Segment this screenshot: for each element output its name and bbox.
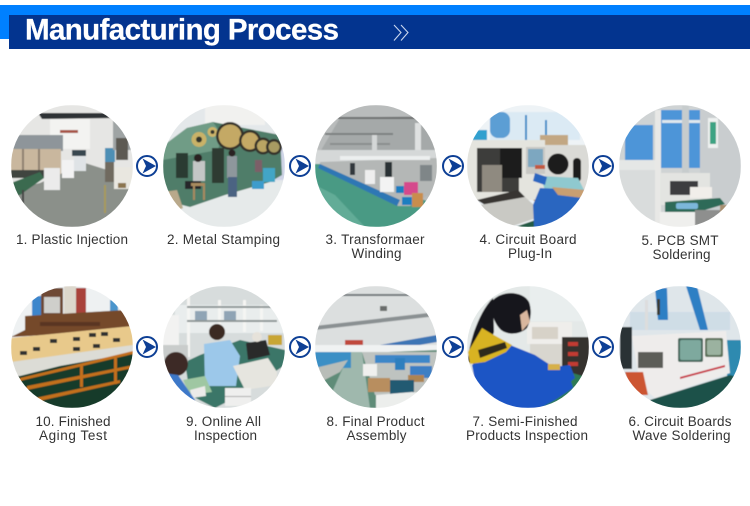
icon: double chevron bbox=[394, 25, 408, 40]
photo: semi-finished inspection bbox=[467, 286, 589, 408]
label: 9. Online All bbox=[186, 414, 261, 429]
step 1: plastic injection bbox=[11, 105, 133, 247]
label: Inspection bbox=[194, 428, 257, 443]
photo: circuit boards wave soldering bbox=[619, 286, 741, 408]
label: 5. PCB SMT bbox=[642, 233, 718, 248]
arrow 7 to 6 bbox=[593, 337, 613, 357]
label: Wave Soldering bbox=[632, 428, 730, 443]
label: Assembly bbox=[346, 428, 407, 443]
label: Aging Test bbox=[39, 428, 107, 443]
step 9: online all inspection bbox=[163, 286, 285, 443]
label: 1. Plastic Injection bbox=[16, 232, 128, 247]
step 5: pcb smt soldering bbox=[619, 105, 741, 262]
photo: metal stamping bbox=[163, 105, 285, 227]
photo: final product assembly bbox=[315, 286, 437, 408]
arrow 3 to 4 bbox=[443, 156, 463, 176]
label: 8. Final Product bbox=[326, 414, 425, 429]
title: Manufacturing Process bbox=[25, 14, 339, 46]
label: Plug-In bbox=[508, 246, 552, 261]
photo: pcb smt soldering bbox=[619, 105, 741, 227]
label: 3. Transformaer bbox=[326, 232, 425, 247]
label bbox=[466, 414, 588, 443]
arrow 4 to 5 bbox=[593, 156, 613, 176]
step 8: final product assembly bbox=[315, 286, 437, 443]
label bbox=[36, 414, 110, 443]
label: Products Inspection bbox=[466, 428, 588, 443]
step 4: circuit board plug-in bbox=[467, 105, 589, 261]
label bbox=[326, 232, 425, 261]
step 6: circuit boards wave soldering bbox=[619, 286, 741, 443]
arrow 2 to 3 bbox=[290, 156, 310, 176]
header banner bbox=[0, 5, 750, 49]
label: 2. Metal Stamping bbox=[167, 232, 280, 247]
label: Winding bbox=[352, 246, 402, 261]
photo: online all inspection bbox=[163, 286, 285, 408]
label: 4. Circuit Board bbox=[480, 232, 576, 247]
arrow 1 to 2 bbox=[137, 156, 157, 176]
step 3: transformer winding bbox=[315, 105, 437, 261]
photo: finished aging test bbox=[11, 286, 133, 408]
arrow 9 to 8 bbox=[290, 337, 310, 357]
label bbox=[480, 232, 576, 261]
label: 10. Finished bbox=[36, 414, 110, 429]
label: 7. Semi-Finished bbox=[472, 414, 578, 429]
step 10: finished aging test bbox=[11, 286, 133, 443]
photo: transformer winding bbox=[315, 105, 437, 227]
label: Soldering bbox=[652, 247, 710, 262]
step 7: semi-finished products inspection bbox=[466, 286, 589, 443]
arrow 8 to 7 bbox=[443, 337, 463, 357]
label bbox=[186, 414, 261, 443]
step 2: metal stamping bbox=[163, 105, 285, 247]
label bbox=[642, 233, 718, 262]
photo: circuit board plug-in bbox=[467, 105, 589, 227]
arrow 10 to 9 bbox=[137, 337, 157, 357]
label bbox=[326, 414, 425, 443]
photo: plastic injection bbox=[11, 105, 133, 227]
label: 6. Circuit Boards bbox=[628, 414, 732, 429]
label bbox=[628, 414, 732, 443]
